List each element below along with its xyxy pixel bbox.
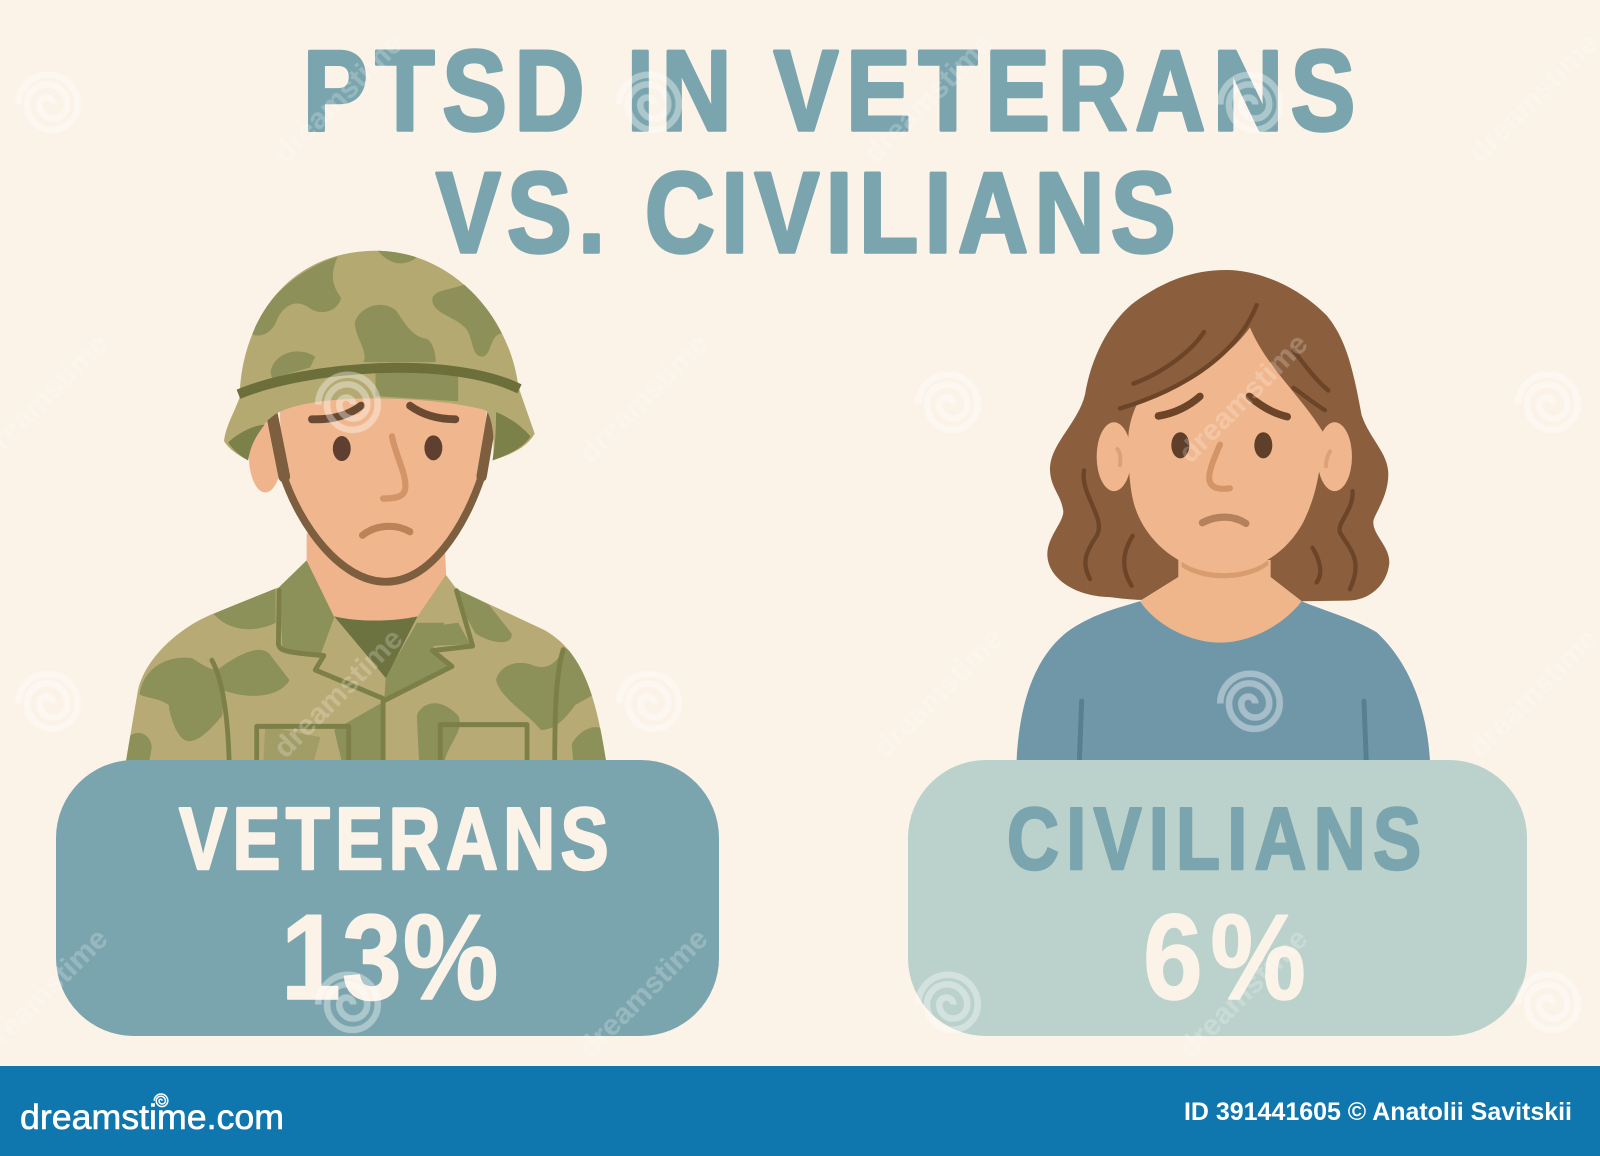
watermark overlay: dreamstime — [1172, 922, 1314, 1064]
eyes — [333, 435, 442, 461]
watermark overlay: dreamstime — [857, 27, 999, 169]
footer logo: dreamstime.com — [20, 1098, 284, 1137]
eyebrows — [1158, 396, 1287, 417]
value: 6%: 6% — [1143, 890, 1306, 1026]
jacket seams — [212, 591, 563, 787]
neck shadow — [1182, 560, 1268, 578]
hair — [1047, 270, 1389, 601]
ear — [249, 417, 282, 492]
panel: civilians — [908, 760, 1527, 1036]
illustration: civilian woman — [1017, 270, 1430, 787]
title: PTSD IN VETERANS — [303, 28, 1355, 155]
sweater — [1017, 601, 1430, 787]
label: veterans: VETERANS — [179, 790, 609, 889]
neck — [1140, 560, 1302, 643]
panel: veterans — [56, 760, 719, 1036]
sleeve seams — [1078, 701, 1367, 787]
face — [279, 398, 487, 582]
watermark overlay: dreamstime — [572, 327, 714, 469]
mouth — [1202, 517, 1246, 523]
undershirt — [334, 616, 418, 678]
hair strands — [1084, 305, 1356, 589]
ear details — [1117, 449, 1330, 466]
title: VS. CIVILIANS — [436, 150, 1176, 277]
watermark overlay: dreamstime — [867, 622, 1009, 764]
neck — [307, 534, 446, 621]
value: 13%: 13% — [281, 890, 498, 1026]
footer bar — [0, 1066, 1600, 1156]
face — [1128, 327, 1323, 572]
watermark overlay: dreamstime — [572, 922, 714, 1064]
footer credit: ID 391441605 © Anatolii Savitskii — [1184, 1098, 1572, 1126]
eyebrows — [312, 406, 455, 419]
illustration: soldier — [124, 248, 610, 787]
nose — [383, 436, 405, 499]
watermark overlay: dreamstime — [267, 622, 409, 764]
helmet — [224, 248, 535, 460]
helmet band — [238, 368, 519, 394]
ears — [1097, 422, 1352, 491]
helmet underside shade — [228, 425, 265, 460]
label: civilians: CIVILIANS — [1007, 790, 1421, 889]
watermark overlay: dreamstime — [1172, 327, 1314, 469]
eyes — [1171, 432, 1272, 458]
nose — [1209, 445, 1230, 489]
chin strap — [272, 412, 493, 582]
title — [303, 28, 1355, 277]
watermark overlay: dreamstime — [267, 27, 409, 169]
mouth — [362, 526, 410, 535]
uniform jacket — [126, 560, 606, 760]
